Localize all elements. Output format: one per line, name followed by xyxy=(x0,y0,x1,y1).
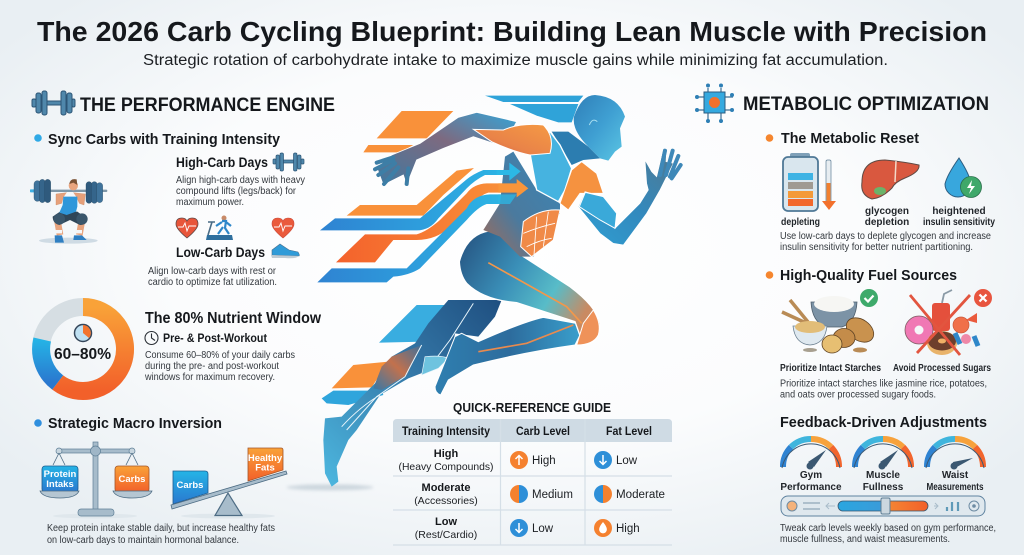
icon: seesaw xyxy=(171,448,287,518)
row: low: Low xyxy=(435,516,457,528)
heading: feedback-driven adjustments: Feedback-Driven Adjustments xyxy=(780,414,987,431)
icon: barbell xyxy=(32,91,75,115)
text: macro inversion description xyxy=(47,523,275,546)
row: moderate: Moderate xyxy=(616,489,665,501)
gauge: muscle fullness: Muscle xyxy=(866,470,900,481)
row: high: Low xyxy=(616,455,638,467)
gauge: muscle fullness: Fullness xyxy=(863,482,904,493)
row: low xyxy=(415,516,640,541)
icon: balance scale: Protein xyxy=(44,469,77,480)
text: high-carb description xyxy=(176,175,305,208)
central runner illustration xyxy=(287,95,681,490)
heading: strategic macro inversion: Strategic Macro Inversion xyxy=(48,415,222,432)
bullet xyxy=(34,134,42,142)
text: nutrient window description xyxy=(144,350,295,383)
shin orange line xyxy=(478,325,573,352)
icon: balance scale xyxy=(40,442,152,518)
text: nutrient window description: Consume 60–80% of your daily carbs xyxy=(145,350,295,361)
heading: high-carb days: High-Carb Days xyxy=(176,154,268,170)
table header: Carb Level xyxy=(516,426,570,438)
text: macro inversion description: on low-carb days to maintain hormonal balance. xyxy=(47,535,239,546)
icon: chip xyxy=(695,84,734,123)
icon: seesaw: Fats xyxy=(255,462,275,474)
abs grid lines xyxy=(523,212,555,255)
labels: fuel sources xyxy=(780,363,991,374)
icon: clock in donut xyxy=(74,324,92,342)
labels: fuel sources: Prioritize Intact Starches xyxy=(780,363,881,374)
arrowheads over torso xyxy=(497,163,528,204)
text: metabolic reset description: insulin sensitivity for better nutrient partitioning. xyxy=(780,242,973,253)
front lower leg and foot xyxy=(435,317,585,395)
text: low-carb description xyxy=(148,266,277,288)
icon: clock xyxy=(145,332,158,344)
heading: low-carb days: Low-Carb Days xyxy=(176,244,265,260)
torso xyxy=(483,152,560,257)
icon: seesaw: Healthy xyxy=(248,453,283,464)
text: macro inversion description: Keep protein intake stable daily, but increase healthy fats xyxy=(47,523,275,534)
title: The 2026 Carb Cycling Blueprint: Building Lean Muscle with Precision xyxy=(37,16,987,47)
icon: small barbell xyxy=(273,153,304,171)
text: low-carb description: cardio to optimize fat utilization. xyxy=(148,277,277,288)
table header xyxy=(393,419,672,442)
abs xyxy=(521,210,560,257)
bullet xyxy=(766,271,773,279)
text: high-carb description: maximum power. xyxy=(176,197,244,208)
knee xyxy=(577,310,599,345)
rear hand fingers xyxy=(375,157,408,184)
speed stripes xyxy=(317,96,583,405)
icon: balance scale: Carbs xyxy=(119,474,145,485)
heading: QUICK-REFERENCE GUIDE xyxy=(453,401,611,415)
row: low: Low xyxy=(532,523,554,535)
gauge: gym performance: Gym xyxy=(800,470,822,481)
chest blue xyxy=(530,132,572,202)
text: fuel sources description: and oats over processed sugary foods. xyxy=(780,390,936,400)
row: high: High xyxy=(434,448,458,460)
table header: Training Intensity xyxy=(402,426,491,438)
icon: intact starches xyxy=(782,296,878,353)
row: high: (Heavy Compounds) xyxy=(398,461,494,473)
ear xyxy=(589,120,597,125)
thigh xyxy=(459,231,600,345)
heading: 80% nutrient window: The 80% Nutrient Window xyxy=(145,310,322,327)
icon: processed sugars crossed out xyxy=(905,290,978,355)
icon: thermometer arrow xyxy=(822,160,836,210)
row: moderate: Moderate xyxy=(422,482,470,494)
row: high: High xyxy=(532,455,556,467)
row: low: (Rest/Cardio) xyxy=(415,529,477,541)
gauge: waist measurements: Measurements xyxy=(926,482,984,493)
row: moderate xyxy=(414,482,665,507)
gauge: gym performance: Performance xyxy=(780,482,842,493)
row: moderate: Medium xyxy=(532,489,573,501)
table header: Fat Level xyxy=(606,426,652,438)
panel: the performance engine xyxy=(30,91,335,546)
rear calf xyxy=(373,345,422,390)
gauge: muscle fullness xyxy=(854,439,912,493)
gauge: gym performance xyxy=(780,439,842,493)
bullet xyxy=(34,419,42,427)
heading: metabolic optimization: METABOLIC OPTIMIZATION xyxy=(743,94,989,115)
gauge: waist measurements xyxy=(926,439,984,493)
text: high-carb description: compound lifts (legs/back) for xyxy=(176,186,297,197)
panel: metabolic optimization xyxy=(695,84,996,545)
text: nutrient window description: windows for maximum recovery. xyxy=(144,372,275,383)
text: feedback description: Tweak carb levels weekly based on gym performance, xyxy=(780,523,996,534)
heading: the performance engine: THE PERFORMANCE ENGINE xyxy=(80,95,335,116)
front arm xyxy=(578,148,673,245)
icon: heart rate xyxy=(176,218,198,238)
text: metabolic reset description xyxy=(780,231,991,253)
icon labels: depletion xyxy=(865,217,909,228)
rear leg xyxy=(323,300,502,487)
deltoid xyxy=(473,124,551,155)
heading: the metabolic reset: The Metabolic Reset xyxy=(781,131,919,147)
text: feedback description xyxy=(780,523,996,545)
chest orange xyxy=(560,162,603,210)
chart: donut 60-80% xyxy=(41,307,125,391)
panel: quick-reference guide xyxy=(393,401,672,545)
front hand fingers xyxy=(660,151,681,178)
ground shadow xyxy=(287,484,373,490)
heading: high-quality fuel sources: High-Quality Fuel Sources xyxy=(780,268,957,284)
icon labels: heightened xyxy=(932,206,986,217)
labels: fuel sources: Avoid Processed Sugars xyxy=(893,363,991,374)
subheading: pre and post workout: Pre- & Post-Workout xyxy=(163,331,267,345)
icon: water drop xyxy=(945,158,982,198)
rear heel xyxy=(422,356,448,375)
rear arm xyxy=(377,112,517,185)
icon: seesaw: Carbs xyxy=(177,480,203,491)
text: metabolic reset description: Use low-carb days to deplete glycogen and increase xyxy=(780,231,991,242)
thigh muscle line xyxy=(488,263,582,323)
icon: heart rate right xyxy=(272,218,294,238)
bicep xyxy=(579,192,617,228)
text: feedback description: muscle fullness, and waist measurements. xyxy=(780,534,950,545)
icon: battery xyxy=(783,153,818,211)
text: nutrient window description: during the pre- and post-workout xyxy=(145,361,279,372)
bullet xyxy=(766,134,773,142)
heading: sync carbs: Sync Carbs with Training Intensity xyxy=(48,131,281,148)
icon: liver xyxy=(862,160,919,199)
icon: squatting lifter xyxy=(30,179,107,244)
text: high-carb description: Align high-carb days with heavy xyxy=(176,175,305,186)
row: moderate: (Accessories) xyxy=(414,495,478,507)
icon labels: glycogen xyxy=(865,206,909,217)
icon labels: depleting xyxy=(781,217,820,228)
row: low: High xyxy=(616,523,640,535)
value: 60–80% xyxy=(54,346,111,363)
text: fuel sources description: Prioritize intact starches like jasmine rice, potatoes, xyxy=(780,378,987,390)
icon: running shoe xyxy=(271,244,299,258)
neck xyxy=(552,132,600,165)
text: fuel sources description xyxy=(780,378,987,400)
icon: green check xyxy=(860,289,878,307)
text: low-carb description: Align low-carb days with rest or xyxy=(148,266,277,277)
icon: treadmill xyxy=(206,216,233,240)
icon labels: insulin sensitivity xyxy=(923,217,995,228)
row: high xyxy=(398,448,638,473)
rear leg tendon lines xyxy=(342,303,473,430)
head xyxy=(574,95,625,161)
subtitle: Strategic rotation of carbohydrate intake to maximize muscle gains while minimizing fat accumulation. xyxy=(143,52,888,69)
slider xyxy=(781,496,985,516)
icon: balance scale: Intaks xyxy=(46,479,74,490)
gauge: waist measurements: Waist xyxy=(942,470,969,481)
icon: red x xyxy=(974,289,992,307)
icon labels xyxy=(781,206,995,228)
